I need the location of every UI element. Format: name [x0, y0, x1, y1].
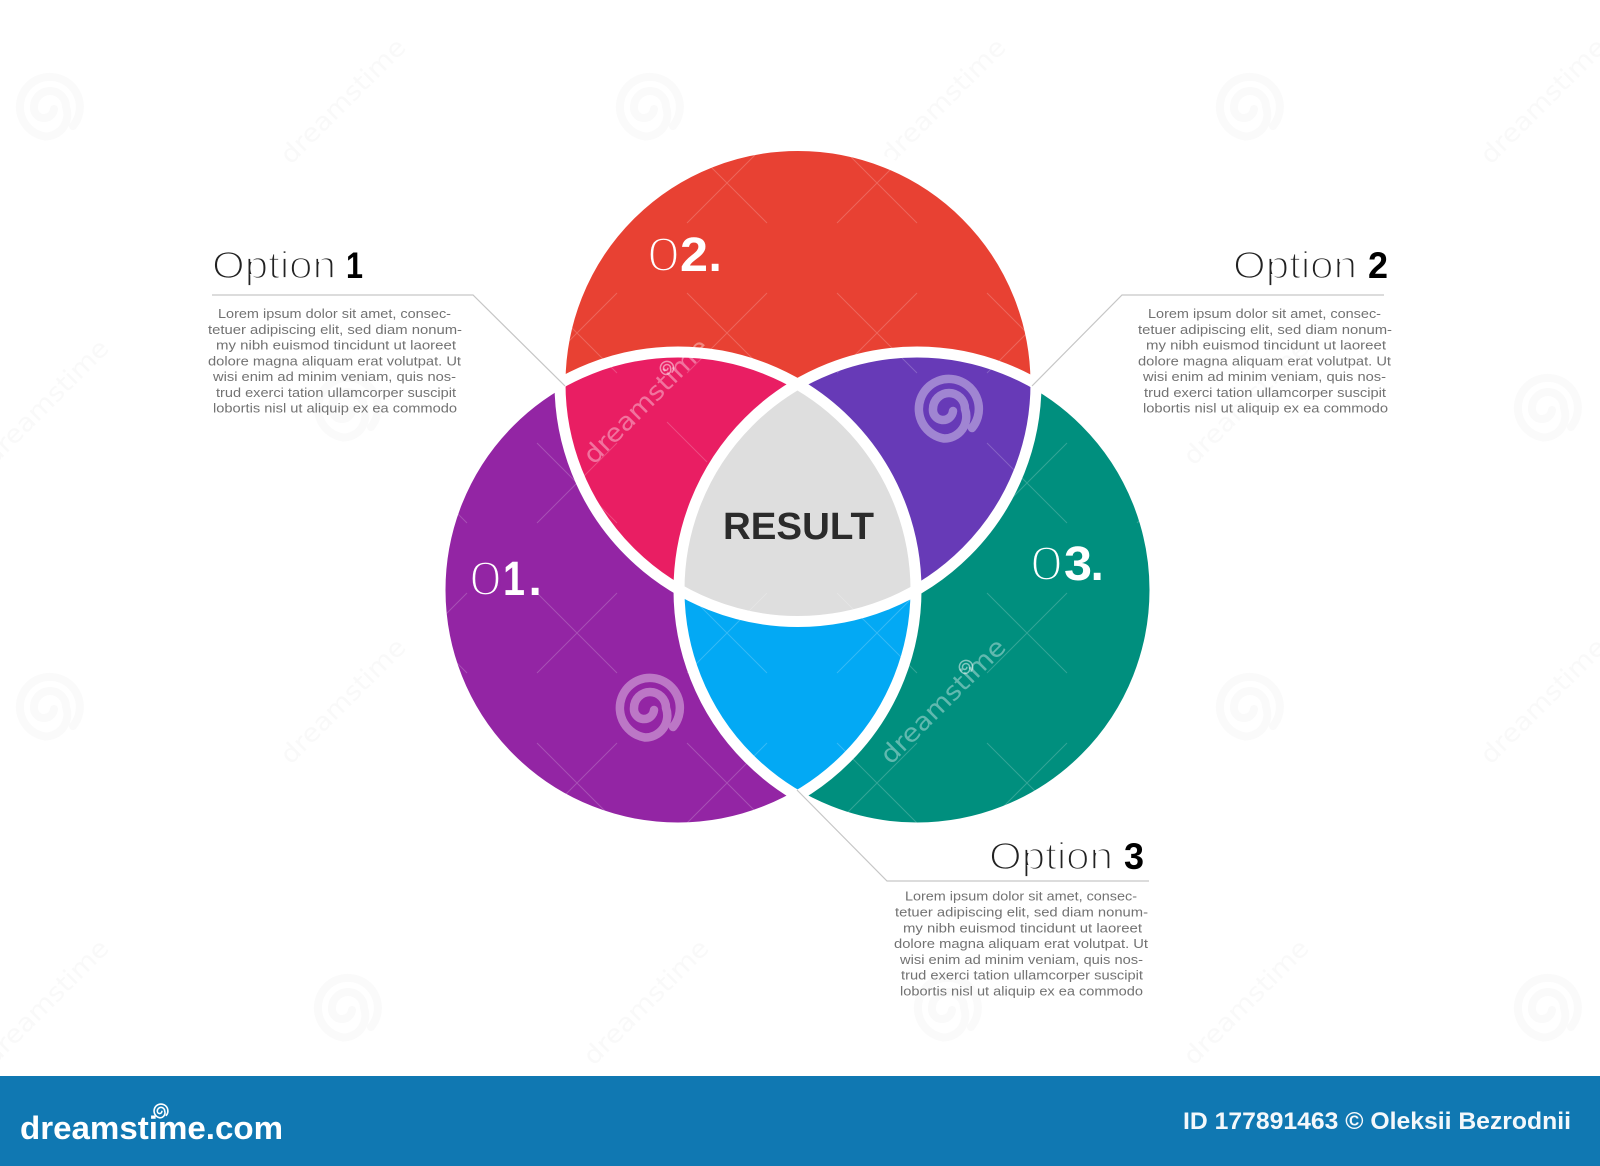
body text 2: [1138, 306, 1392, 416]
body text 2: Lorem ipsum dolor sit amet, consec-: [1148, 306, 1381, 321]
label: RESULT: RESULT: [723, 506, 874, 548]
watermark spiral on violet: [919, 379, 979, 439]
label: 03.: 3: [1064, 538, 1092, 591]
label: 03.: 0: [1030, 538, 1063, 591]
body text 3: dolore magna aliquam erat volutpat. Ut: [894, 936, 1148, 951]
callout: Option 1: [208, 245, 565, 416]
watermark spiral on purple: [620, 678, 680, 738]
label: 01.: 0: [469, 553, 502, 606]
label: 01.: [469, 553, 542, 606]
heading: Option 1: 1: [346, 245, 363, 286]
footer bar: [0, 1076, 1600, 1166]
body text 2: dolore magna aliquam erat volutpat. Ut: [1138, 354, 1391, 368]
body text 3: [894, 889, 1148, 998]
overlap: blue: [684, 599, 910, 790]
label: 02.: .: [708, 229, 722, 282]
body text 1: trud exerci tation ullamcorper suscipit: [216, 385, 456, 400]
watermark wordmark on teal: dreamstime: [874, 632, 1012, 770]
label: 03.: [1030, 538, 1104, 591]
background watermark wordmarks: dreamstime: [874, 32, 1012, 170]
body text 2: trud exerci tation ullamcorper suscipit: [1144, 385, 1386, 400]
circle 02: red: [560, 146, 1036, 622]
label: 02.: 2: [680, 229, 708, 282]
body text 1: lobortis nisl ut aliquip ex ea commodo: [213, 401, 457, 416]
background watermark wordmarks: dreamstime: [1474, 632, 1600, 770]
venn diagram: [446, 151, 1150, 822]
overlap: grey centre: [684, 390, 910, 616]
circle outlines: white bands: [440, 146, 1155, 828]
image id and credit: ID 177891463 © Oleksii Bezrodnii: [1183, 1108, 1571, 1135]
watermark wordmark on pink: dreamstime: [577, 332, 715, 470]
body text 1: Lorem ipsum dolor sit amet, consec-: [218, 306, 451, 321]
footer logo spiral: [154, 1104, 168, 1118]
body text 3: Lorem ipsum dolor sit amet, consec-: [905, 889, 1137, 904]
body text 1: [208, 306, 462, 416]
body text 2: my nibh euismod tincidunt ut laoreet: [1146, 338, 1386, 353]
circle 01: purple: [440, 352, 916, 828]
body text 3: trud exerci tation ullamcorper suscipit: [901, 968, 1143, 983]
background watermark wordmarks: dreamstime: [274, 32, 412, 170]
heading: Option 2: Option: [1233, 245, 1357, 287]
heading: Option 2: 2: [1368, 245, 1388, 286]
label: 03.: .: [1090, 538, 1104, 591]
heading: Option 3: 3: [1124, 836, 1144, 877]
footer logo wordmark: dreamstime.com: [20, 1110, 283, 1146]
background watermark wordmarks: dreamstime: [577, 933, 715, 1071]
body text 2: wisi enim ad minim veniam, quis nos-: [1142, 369, 1386, 384]
background watermark wordmarks: dreamstime: [274, 632, 412, 770]
overlap: pink: [566, 358, 786, 580]
body text 1: wisi enim ad minim veniam, quis nos-: [212, 369, 456, 384]
leader line 2: [1032, 295, 1384, 386]
body text 1: dolore magna aliquam erat volutpat. Ut: [208, 354, 461, 368]
small spiral on teal: [959, 660, 973, 673]
small spiral on pink: [660, 361, 674, 374]
body text 3: lobortis nisl ut aliquip ex ea commodo: [900, 984, 1143, 998]
body text 3: my nibh euismod tincidunt ut laoreet: [903, 920, 1142, 935]
label: 01.: .: [528, 553, 542, 606]
circle 03: teal: [679, 352, 1155, 828]
background watermark wordmarks: dreamstime: [1177, 333, 1315, 471]
background watermark wordmarks: dreamstime: [1177, 933, 1315, 1071]
leader line 3: [797, 790, 1149, 881]
label: 01.: 1: [503, 553, 525, 606]
callout: Option 3: [797, 790, 1149, 998]
body text 1: tetuer adipiscing elit, sed diam nonum-: [208, 322, 462, 337]
background watermark wordmarks: dreamstime: [1474, 32, 1600, 170]
heading: Option 3: Option: [989, 836, 1113, 878]
body text 3: tetuer adipiscing elit, sed diam nonum-: [895, 904, 1148, 920]
body text 2: lobortis nisl ut aliquip ex ea commodo: [1143, 401, 1388, 416]
body text 3: wisi enim ad minim veniam, quis nos-: [899, 952, 1143, 967]
label: 02.: [647, 229, 722, 282]
label: 02.: 0: [647, 229, 680, 282]
heading: Option 1: Option: [212, 245, 336, 287]
watermark lattice crosses: [446, 155, 1139, 822]
body text 1: my nibh euismod tincidunt ut laoreet: [216, 338, 456, 353]
overlap: violet: [808, 358, 1030, 581]
body text 2: tetuer adipiscing elit, sed diam nonum-: [1138, 322, 1392, 337]
leader line 1: [212, 295, 565, 386]
callout: Option 2: [1032, 245, 1392, 416]
